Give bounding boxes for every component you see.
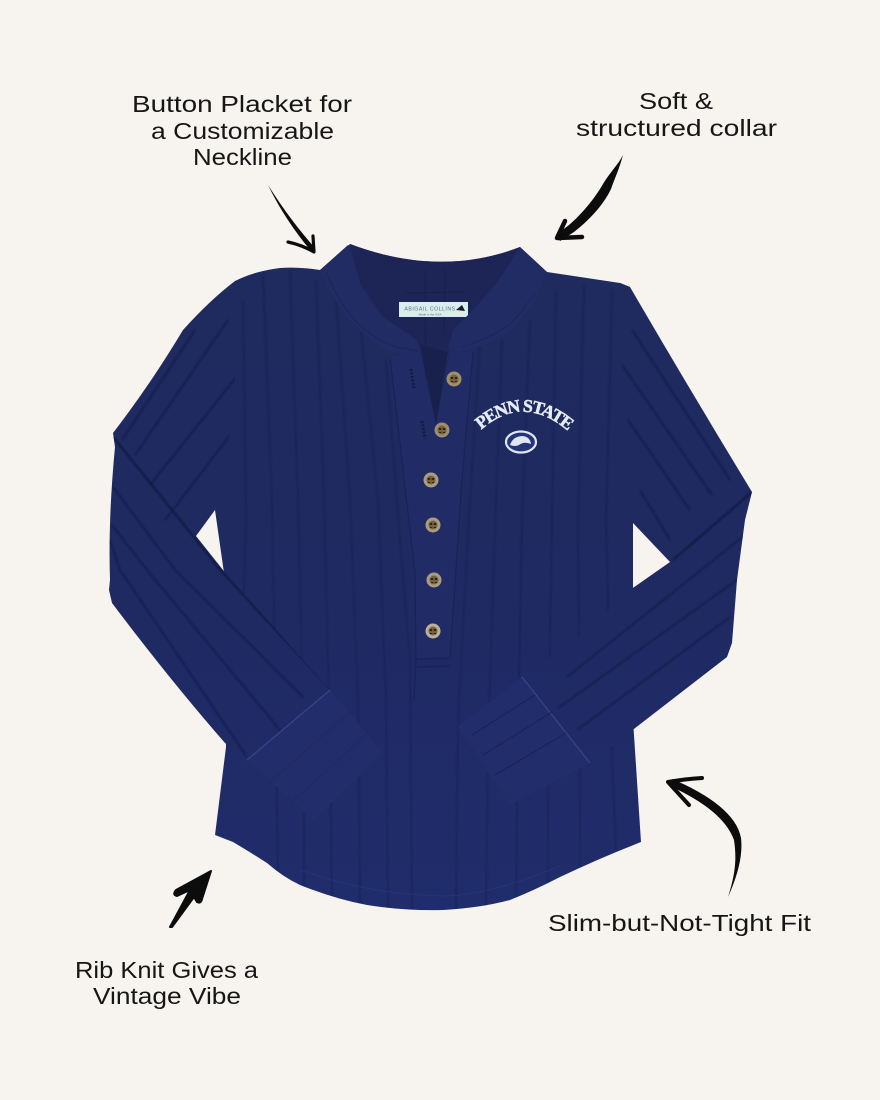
caption: rib knit — [75, 957, 258, 1009]
buttonholes — [411, 369, 425, 439]
right cuff — [458, 677, 590, 805]
neck opening — [350, 244, 520, 425]
buttons — [424, 372, 462, 638]
callout: button placket — [132, 91, 352, 252]
hem stitching — [300, 866, 560, 896]
shirt body — [215, 244, 641, 910]
caption: fit: Slim-but-Not-Tight Fit — [548, 910, 812, 936]
left cuff — [247, 690, 383, 820]
caption: collar: Soft & — [639, 88, 713, 114]
caption: collar — [576, 88, 777, 141]
arrow: to hem side — [668, 778, 741, 897]
button placket — [390, 352, 473, 700]
Penn State chest logo — [474, 400, 574, 454]
callout: rib knit — [75, 871, 258, 1009]
caption: collar: structured collar — [576, 115, 777, 141]
caption: button placket: Button Placket for — [132, 91, 352, 117]
callout: collar — [556, 88, 777, 241]
collar — [320, 245, 547, 356]
brand neck label: Made in the USA — [419, 312, 441, 316]
caption: button placket: Neckline — [193, 144, 292, 170]
caption: rib knit: Vintage Vibe — [93, 983, 241, 1009]
right sleeve — [458, 283, 752, 805]
shirt — [109, 244, 752, 910]
callout: fit — [548, 778, 812, 936]
left sleeve — [109, 281, 383, 820]
arrow: to neckline — [268, 185, 315, 252]
brand neck label: ABIGAIL COLLINS — [404, 306, 456, 312]
caption: rib knit: Rib Knit Gives a — [75, 957, 258, 983]
arrow: to hem — [170, 871, 211, 927]
caption: button placket: a Customizable — [151, 118, 334, 144]
caption: button placket — [132, 91, 352, 170]
brand neck label — [399, 302, 468, 317]
arrow: to collar — [556, 155, 623, 241]
